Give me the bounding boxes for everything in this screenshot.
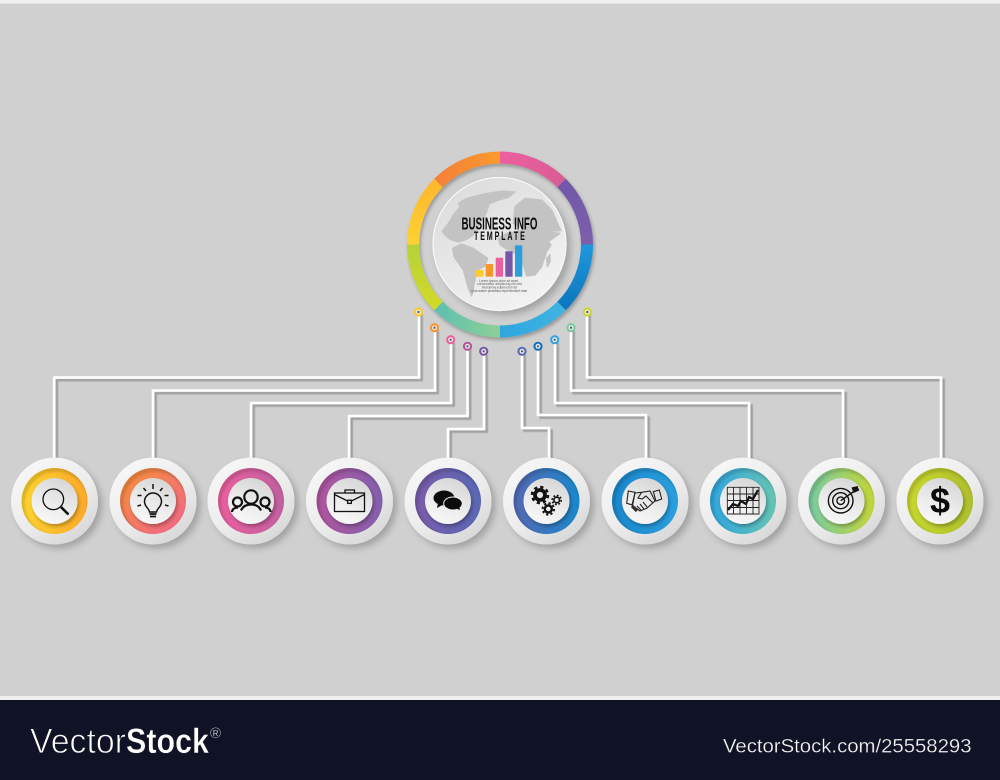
node colour ring (808, 468, 878, 538)
icon: people (232, 490, 270, 512)
caption text: Quis autem phasellus reprehenderit vitae. (471, 289, 528, 293)
footer image id: VectorStock.com/25558293 (723, 737, 972, 758)
icon: briefcase (334, 490, 364, 512)
top edge strip (0, 0, 1000, 4)
connector lines (54, 312, 941, 460)
hub disc (433, 178, 566, 310)
node colour ring (316, 468, 386, 538)
caption text: Nonummy euismod et nisi (482, 286, 517, 290)
node colour ring (120, 468, 189, 538)
node 1: search (11, 458, 98, 544)
icon: speech bubbles (434, 490, 462, 510)
node 4: briefcase (306, 458, 393, 544)
icon: line chart grid (727, 487, 759, 514)
icon: dollar sign: $ (930, 480, 950, 521)
node colour ring (907, 468, 976, 538)
icon: gears (532, 487, 561, 515)
footer logo (30, 722, 221, 761)
node 8: growth chart (700, 458, 786, 544)
icon: target with arrow (828, 486, 859, 513)
node 3: team (208, 458, 294, 544)
node 10: dollar (896, 458, 984, 544)
title: business info: BUSINESS INFO (462, 214, 538, 234)
footer logo: Vector (30, 722, 126, 761)
connector end dots (414, 307, 592, 356)
caption text: consectetur adipiscing elit sed (477, 282, 522, 286)
node 2: idea (110, 458, 196, 544)
bottom edge strip (0, 696, 1000, 700)
caption text (471, 279, 528, 293)
node colour ring (710, 468, 779, 538)
node 6: gears (503, 458, 590, 544)
icon: magnifier (43, 489, 68, 514)
node colour ring (22, 468, 90, 538)
node 5: chat (404, 458, 492, 544)
hub colour ring (407, 152, 593, 338)
icon: light bulb (138, 484, 168, 516)
central hub (407, 152, 593, 338)
node colour ring (218, 468, 287, 538)
footer logo: ® (210, 725, 221, 742)
icon: handshake (627, 490, 662, 511)
mini bar chart (476, 245, 522, 277)
caption text: Lorem ipsum dolor sit amet, (479, 279, 519, 283)
footer bar (0, 700, 1000, 780)
subtitle: template: TEMPLATE (474, 230, 525, 244)
node colour ring (415, 468, 484, 538)
footer logo: Stock (126, 722, 209, 761)
node colour ring (612, 468, 681, 538)
node colour ring (514, 468, 582, 538)
node 7: handshake (602, 458, 688, 544)
node 9: target (798, 458, 885, 544)
world map (442, 191, 561, 296)
